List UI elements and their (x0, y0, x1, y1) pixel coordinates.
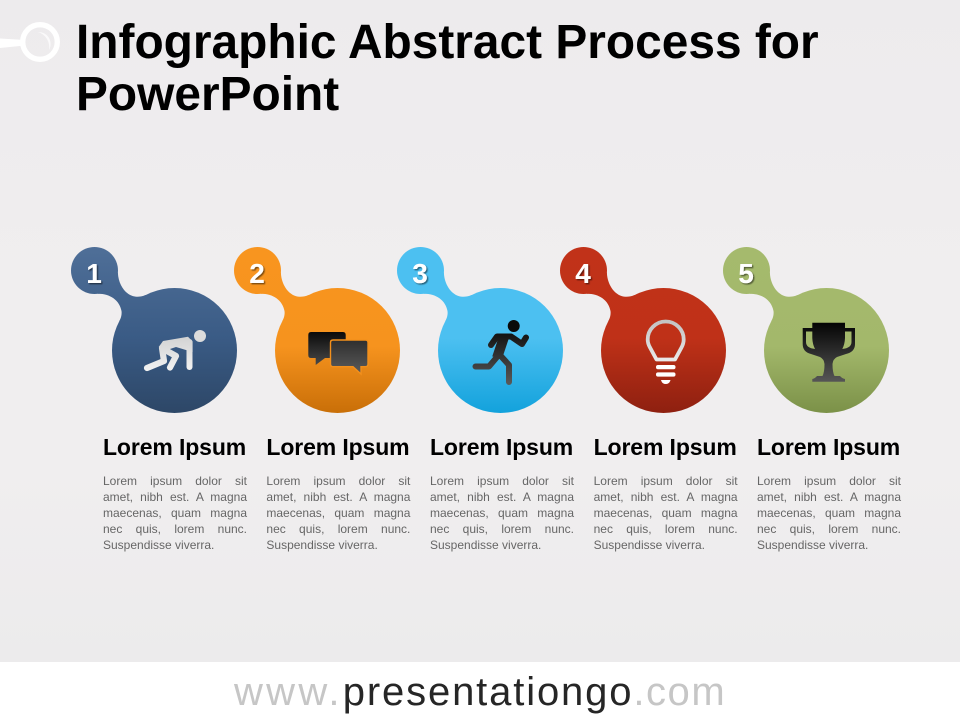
text block: step 5 (757, 434, 902, 552)
text block: step 1: Suspendisse viverra. (103, 538, 214, 552)
step 1 marker (71, 247, 237, 413)
text block: step 5: Suspendisse viverra. (757, 538, 868, 552)
text block: step 1: Lorem ipsum dolor sit (103, 474, 247, 488)
step 4 marker (560, 247, 726, 413)
text block: step 3: nec quis, lorem nunc. (430, 522, 574, 536)
text block: step 4: Lorem Ipsum (594, 434, 737, 460)
text block: step 3: Suspendisse viverra. (430, 538, 541, 552)
icon: runner (476, 320, 526, 382)
number 1: 1 (86, 258, 102, 289)
number 4: 4 (575, 258, 591, 289)
icon: light bulb (648, 322, 684, 384)
number 3: 3 (412, 258, 428, 289)
number 5: 5 (738, 258, 754, 289)
connected circle shape 1 (71, 247, 237, 413)
text block: step 5: Lorem ipsum dolor sit (757, 474, 901, 488)
text block: step 3: amet, nibh est. A magna (430, 490, 574, 504)
text block: step 3 (430, 434, 574, 552)
text block: step 5: amet, nibh est. A magna (757, 490, 901, 504)
title: PowerPoint (76, 68, 339, 121)
text block: step 4: amet, nibh est. A magna (594, 490, 738, 504)
icon: speech bubbles (308, 332, 368, 374)
connected circle shape 3 (397, 247, 563, 413)
text block: step 5: maecenas, quam magna (757, 506, 901, 520)
footer: website address (0, 662, 960, 720)
text block: step 1: Lorem Ipsum (103, 434, 246, 460)
connected circle shape 5 (723, 247, 889, 413)
text block: step 3: Lorem Ipsum (430, 434, 573, 460)
icon: trophy (803, 323, 855, 382)
footer: website address: www.presentationgo.com (234, 670, 726, 714)
text block: step 1 (103, 434, 248, 552)
step 2 marker (234, 247, 400, 413)
text block: step 2 (266, 434, 410, 552)
text block: step 3: maecenas, quam magna (430, 506, 574, 520)
title: Infographic Abstract Process for (76, 16, 819, 69)
step 3 marker (397, 247, 563, 413)
text block: step 5: nec quis, lorem nunc. (757, 522, 901, 536)
title (76, 16, 819, 121)
text block: step 1: amet, nibh est. A magna (103, 490, 247, 504)
text block: step 4: nec quis, lorem nunc. (594, 522, 738, 536)
text block: step 2: Lorem ipsum dolor sit (266, 474, 410, 488)
text block: step 3: Lorem ipsum dolor sit (430, 474, 574, 488)
step 5 marker (723, 247, 889, 413)
icon: top-left white ring and pointer (0, 25, 57, 59)
text block: step 2: nec quis, lorem nunc. (266, 522, 410, 536)
text block: step 2: Lorem Ipsum (266, 434, 409, 460)
text block: step 4: maecenas, quam magna (594, 506, 738, 520)
icon: crouching athlete (147, 330, 206, 368)
text block: step 5: Lorem Ipsum (757, 434, 900, 460)
text block: step 4: Lorem ipsum dolor sit (594, 474, 738, 488)
text block: step 2: Suspendisse viverra. (266, 538, 378, 552)
connected circle shape 4 (560, 247, 726, 413)
number 2: 2 (249, 258, 265, 289)
text block: step 2: amet, nibh est. A magna (266, 490, 410, 504)
connected circle shape 2 (234, 247, 400, 413)
text block: step 4 (594, 434, 738, 552)
text block: step 2: maecenas, quam magna (266, 506, 410, 520)
text block: step 1: maecenas, quam magna (103, 506, 247, 520)
text block: step 1: nec quis, lorem nunc. (103, 522, 247, 536)
text block: step 4: Suspendisse viverra. (594, 538, 705, 552)
